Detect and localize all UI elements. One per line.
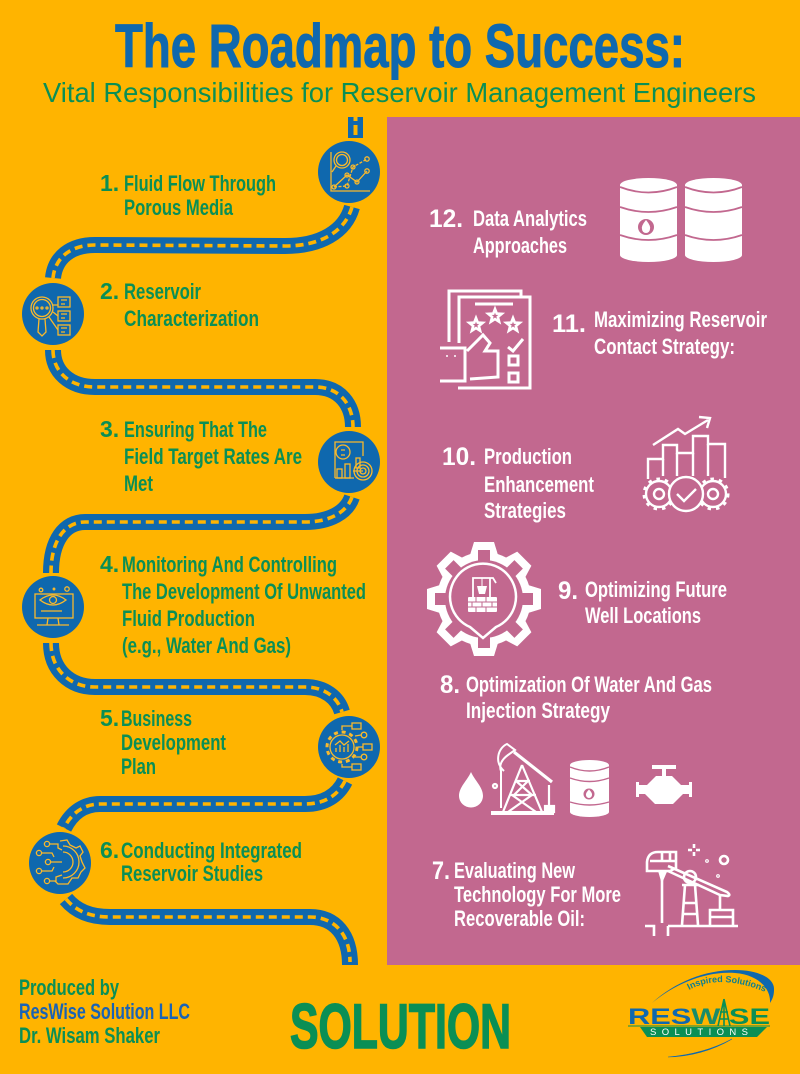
step 6 text <box>100 837 302 886</box>
step 9 text: Well Locations <box>585 603 701 628</box>
step 9 text <box>558 577 727 628</box>
step 2 text: 2. <box>100 278 119 304</box>
icon: thumbs up review sheet <box>440 291 530 388</box>
step 12 text: Approaches <box>473 233 567 258</box>
icon: oil drop, pumpjack, barrel and valve <box>459 744 692 817</box>
road start stub <box>348 117 363 138</box>
step 7 text: Evaluating New <box>454 858 576 883</box>
step 8 text <box>440 671 712 723</box>
icon: step 6 integrated studies gear circuit <box>29 832 91 894</box>
step 2 text <box>100 278 259 331</box>
icon: growth chart with gears <box>644 417 728 511</box>
step 1 text: Porous Media <box>124 195 234 220</box>
step 4 text: (e.g., Water And Gas) <box>122 633 291 658</box>
step 9 text: Optimizing Future <box>585 577 727 602</box>
logo subtitle: SOLUTIONS <box>650 1027 748 1038</box>
step 12 text <box>429 205 587 258</box>
step 3 text: 3. <box>100 416 119 442</box>
panel: right column background <box>387 117 800 965</box>
icon: outlined pumpjack <box>645 844 738 936</box>
step 4 text: The Development Of Unwanted <box>122 579 366 604</box>
logo lower arc <box>668 1039 732 1057</box>
icon: gear with well location pin <box>427 542 541 656</box>
step 5 text: Business <box>121 706 192 731</box>
step 5 text <box>100 705 227 779</box>
step 6 text: Conducting Integrated <box>121 838 302 863</box>
step 10 text: Enhancement <box>484 472 595 497</box>
step 11 text: 11. <box>552 310 586 338</box>
icon: step 3 target rates report <box>318 431 380 493</box>
step 8 text: Optimization Of Water And Gas <box>466 672 712 697</box>
step 5 text: Plan <box>121 754 156 779</box>
step 12 text: 12. <box>429 205 463 233</box>
logo: ResWise Solutions <box>628 970 774 1058</box>
footer credits <box>19 975 190 1048</box>
step 3 text <box>100 416 302 496</box>
step 8 text: 8. <box>440 671 460 699</box>
footer credits: Dr. Wisam Shaker <box>19 1023 160 1048</box>
step 11 text: Contact Strategy: <box>594 334 735 359</box>
step 6 text: 6. <box>100 837 119 863</box>
step 11 text <box>552 307 767 359</box>
logo name: RES W ISE <box>628 1004 770 1029</box>
step 10 text: Strategies <box>484 498 566 523</box>
step 10 text: 10. <box>442 443 476 471</box>
road segment 5 <box>64 781 345 828</box>
step 7 text: Recoverable Oil: <box>454 906 585 931</box>
step 4 text: Fluid Production <box>122 606 255 631</box>
step 10 text <box>442 443 595 523</box>
step 1 text: Fluid Flow Through <box>124 171 276 196</box>
step 5 text: Development <box>121 730 227 755</box>
road segment 1 <box>53 207 352 278</box>
step 7 text: Technology For More <box>454 882 621 907</box>
logo tagline: Inspired Solutions <box>686 976 766 992</box>
step 12 text: Data Analytics <box>473 206 587 231</box>
icon: oil drop <box>459 772 483 808</box>
step 2 text: Characterization <box>124 306 259 331</box>
step 4 text: 4. <box>100 551 119 577</box>
step 4 text: Monitoring And Controlling <box>122 552 337 577</box>
step 5 text: 5. <box>100 705 119 731</box>
logo arc <box>652 970 774 1003</box>
footer credits: Produced by <box>19 975 120 1000</box>
icon: step 5 business gear network <box>318 716 380 778</box>
road segment 3 <box>51 497 352 573</box>
logo banner <box>640 1027 767 1037</box>
step 1 text: 1. <box>100 170 119 196</box>
step 1 text <box>100 170 276 220</box>
roadmap road <box>51 117 363 965</box>
icon: oil barrel <box>570 760 609 817</box>
road segment 2 <box>53 350 353 427</box>
icon: two barrels <box>620 178 742 262</box>
subtitle: Vital Responsibilities for Reservoir Management Engineers <box>43 77 756 108</box>
step 3 text: Field Target Rates Are <box>124 444 302 469</box>
step 2 text: Reservoir <box>124 279 201 304</box>
step 7 text: 7. <box>432 857 450 885</box>
step 10 text: Production <box>484 444 572 469</box>
step 6 text: Reservoir Studies <box>121 861 263 886</box>
step 3 text: Met <box>124 471 154 496</box>
road segment 4 <box>51 643 342 712</box>
logo derrick <box>718 999 730 1026</box>
icon: step 1 analytics magnifier <box>318 141 380 203</box>
footer credits: ResWise Solution LLC <box>19 999 190 1024</box>
step 4 text <box>100 551 366 658</box>
step 9 text: 9. <box>558 577 578 605</box>
road segment 6 <box>66 899 350 965</box>
step 8 text: Injection Strategy <box>466 698 611 723</box>
step 3 text: Ensuring That The <box>124 417 267 442</box>
solution wordmark: SOLUTION <box>290 992 511 1062</box>
icon: pumpjack <box>491 744 554 813</box>
icon: step 2 characterization magnifier <box>22 283 84 345</box>
icon: pipe valve <box>636 765 692 804</box>
icon: step 4 monitoring eye on screen <box>22 576 84 638</box>
step 7 text <box>432 857 621 931</box>
